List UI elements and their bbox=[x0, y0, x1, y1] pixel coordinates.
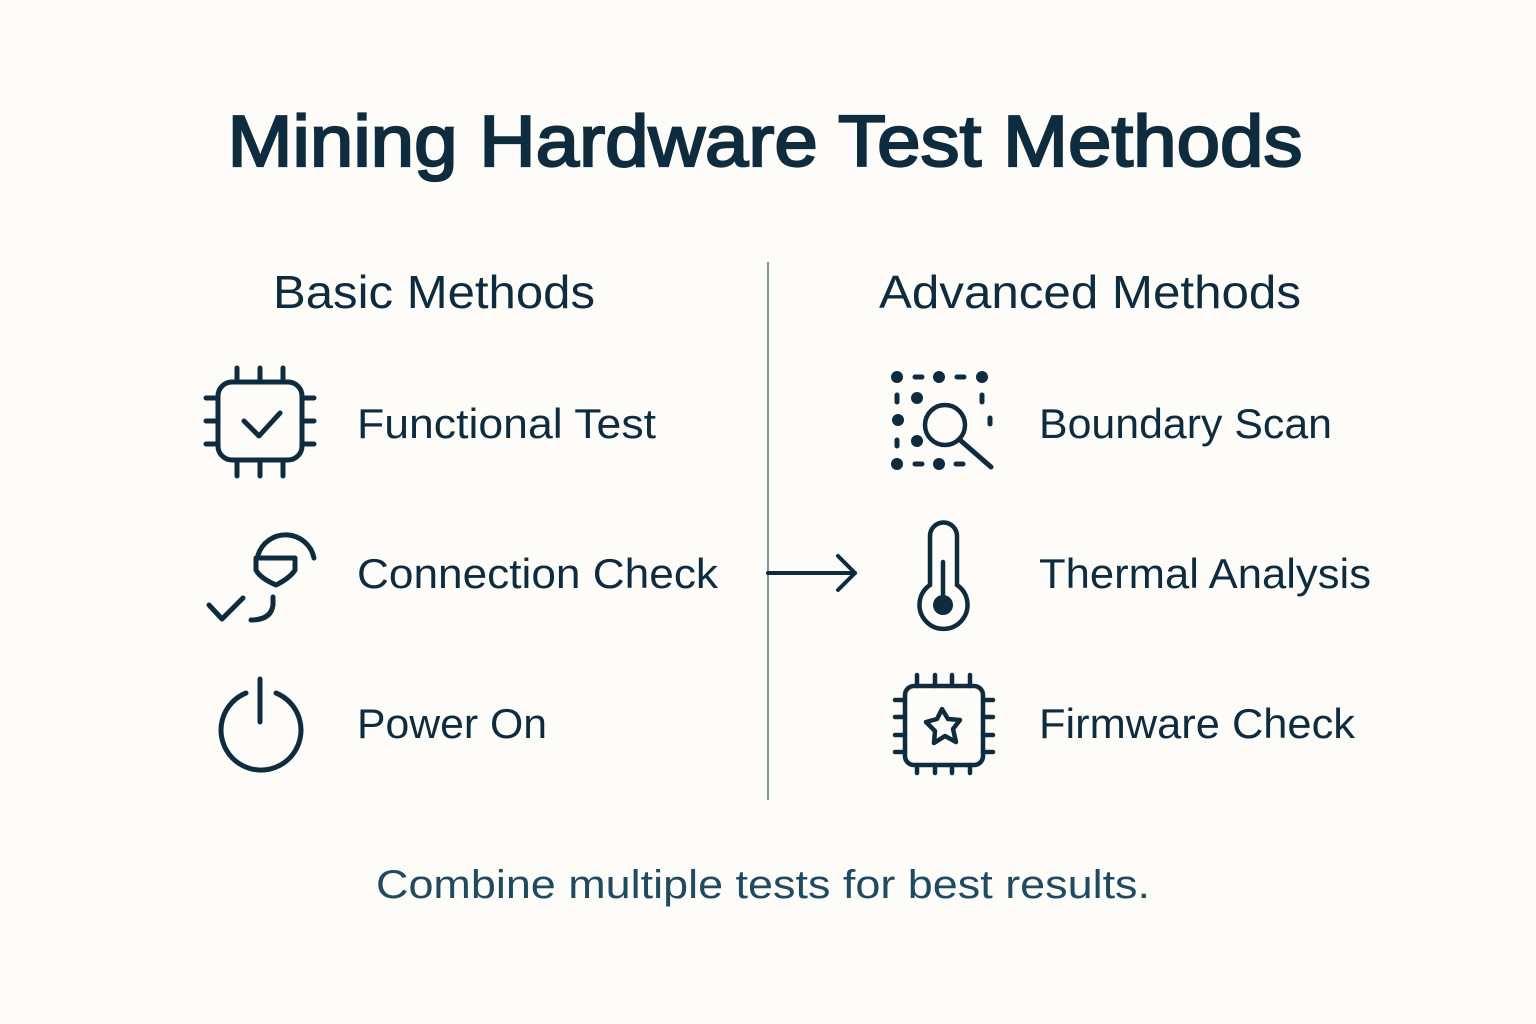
title: Mining Hardware Test Methods bbox=[228, 102, 1302, 182]
text: firmware check: Firmware Check bbox=[1039, 700, 1356, 747]
text: boundary scan: Boundary Scan bbox=[1039, 400, 1332, 447]
icon: chip with check bbox=[206, 368, 314, 476]
text: functional test: Functional Test bbox=[357, 400, 656, 447]
footer text: Combine multiple tests for best results. bbox=[376, 863, 1150, 907]
heading: advanced methods: Advanced Methods bbox=[879, 266, 1301, 318]
icon: thermometer bbox=[920, 522, 968, 629]
icon: connection check bbox=[209, 535, 314, 620]
text: power on: Power On bbox=[357, 700, 547, 747]
icon: boundary scan bbox=[891, 371, 991, 470]
icon: firmware chip bbox=[895, 675, 993, 773]
text: thermal analysis: Thermal Analysis bbox=[1039, 550, 1371, 597]
heading: basic methods: Basic Methods bbox=[273, 266, 595, 318]
icon: power bbox=[221, 679, 301, 770]
text: connection check: Connection Check bbox=[357, 550, 719, 597]
arrow bbox=[768, 556, 855, 590]
